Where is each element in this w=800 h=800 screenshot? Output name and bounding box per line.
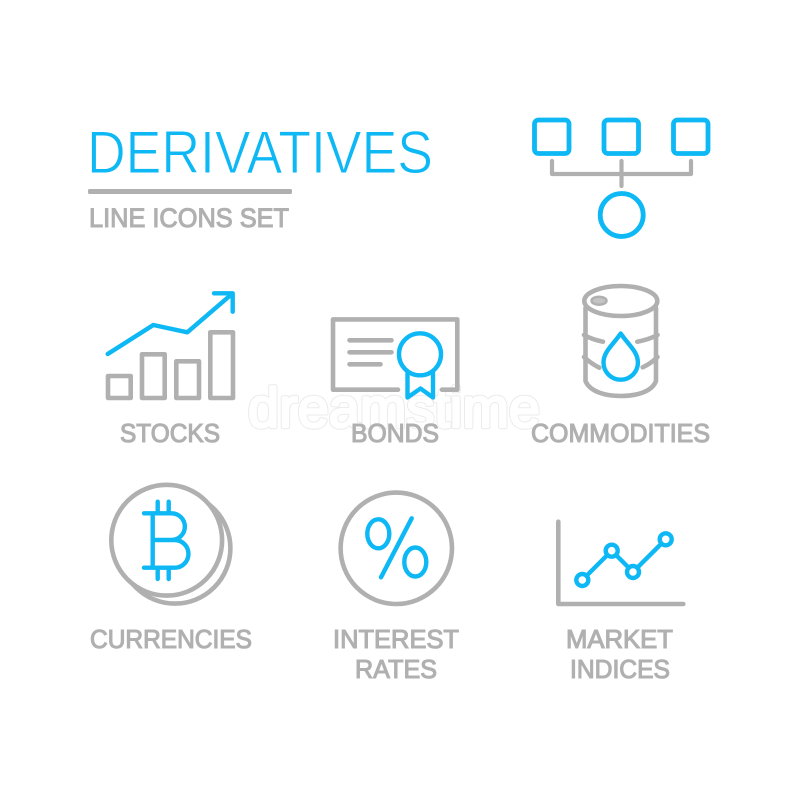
icon: line chart [558, 522, 683, 604]
label: interest rates: RATES [355, 656, 437, 684]
panel: currencies [90, 485, 252, 654]
label: commodities: COMMODITIES [531, 420, 710, 448]
panel: interest rates [333, 493, 459, 684]
icon: network hierarchy [534, 120, 708, 236]
icon: oil barrel with drop [584, 286, 658, 396]
label: bonds: BONDS [351, 420, 439, 448]
icon: bitcoin coins [111, 485, 230, 604]
panel: bonds [333, 319, 457, 448]
label: stocks: STOCKS [120, 420, 220, 448]
panel: stocks [108, 293, 233, 448]
label: interest rates: INTEREST [333, 626, 459, 654]
label: market indices: MARKET [566, 626, 673, 654]
panel: market indices [558, 522, 683, 684]
icon: certificate with rosette [333, 319, 457, 398]
title underline [88, 189, 292, 194]
watermark: dreamstime [248, 376, 540, 439]
label: market indices [566, 626, 673, 684]
title block [87, 119, 433, 233]
icon: percent in circle [341, 493, 452, 604]
watermark: dreamstime [248, 376, 540, 439]
label: currencies: CURRENCIES [90, 626, 252, 654]
icon: rising bars and arrow [108, 293, 233, 398]
title: DERIVATIVES [87, 119, 433, 186]
label: interest rates [333, 626, 459, 684]
label: market indices: INDICES [570, 656, 670, 684]
subtitle: LINE ICONS SET [89, 203, 289, 233]
panel: commodities [531, 286, 710, 448]
